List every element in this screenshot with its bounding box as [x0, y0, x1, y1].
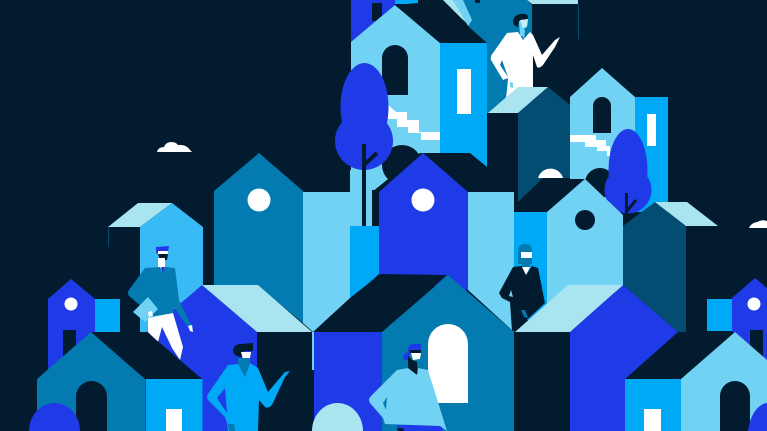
doorway: arch: [76, 381, 107, 431]
cloud: right: [749, 220, 767, 228]
person: woman in dark suit: [499, 244, 545, 331]
tree: tall left: [335, 63, 393, 170]
person: white shirt on upper balcony: [491, 14, 560, 105]
person: man in blue top lower left: [207, 343, 290, 431]
person: man in teal sweater with clipboard: [128, 246, 193, 360]
window: white tall: [457, 69, 471, 114]
door: white arch: [428, 324, 468, 403]
window: arch: [593, 97, 611, 133]
house: teal with dark roof lower left: [29, 332, 202, 431]
stairs: [570, 135, 610, 156]
house: tall dark teal right: [623, 202, 718, 332]
house: top light with stairs: [351, 3, 487, 192]
person: woman in light top: [369, 344, 447, 431]
window: white round: [538, 169, 563, 178]
house: small blue right: [707, 278, 767, 365]
bush: [748, 403, 767, 431]
house: central blue: [379, 153, 514, 332]
window: round: [64, 298, 78, 310]
trousers: [148, 313, 183, 360]
window: round: [748, 298, 760, 310]
window: white tall: [647, 114, 656, 146]
house: sky blue left with pale roof: [108, 203, 203, 332]
house: central upper with pale roof: [488, 87, 570, 203]
tree: right: [604, 129, 652, 230]
house: top teal behind: [463, 0, 579, 113]
cloud: left: [157, 142, 192, 152]
column with tree trunk: [350, 144, 379, 298]
house: tall teal left: [214, 153, 350, 332]
house: round window light: [514, 179, 623, 320]
window: dark round: [575, 210, 595, 230]
house: top blue: [351, 0, 418, 44]
stairs: [388, 105, 440, 140]
house: right small with stairs: [570, 68, 668, 212]
doorway: arch: [720, 381, 750, 431]
house: central teal: [312, 274, 514, 431]
house: blue with pale roof left: [147, 285, 314, 431]
bush: [29, 403, 80, 431]
person: legs at top: [443, 0, 480, 26]
window: white: [166, 409, 182, 431]
house: light lower right: [625, 332, 767, 431]
bush: pale: [312, 403, 363, 431]
window: white: [644, 409, 661, 431]
house: small blue left: [48, 279, 120, 370]
house: blue with pale roof right: [514, 285, 681, 431]
window: round: [248, 188, 270, 212]
window: arch: [382, 45, 408, 95]
window: round: [412, 188, 434, 212]
